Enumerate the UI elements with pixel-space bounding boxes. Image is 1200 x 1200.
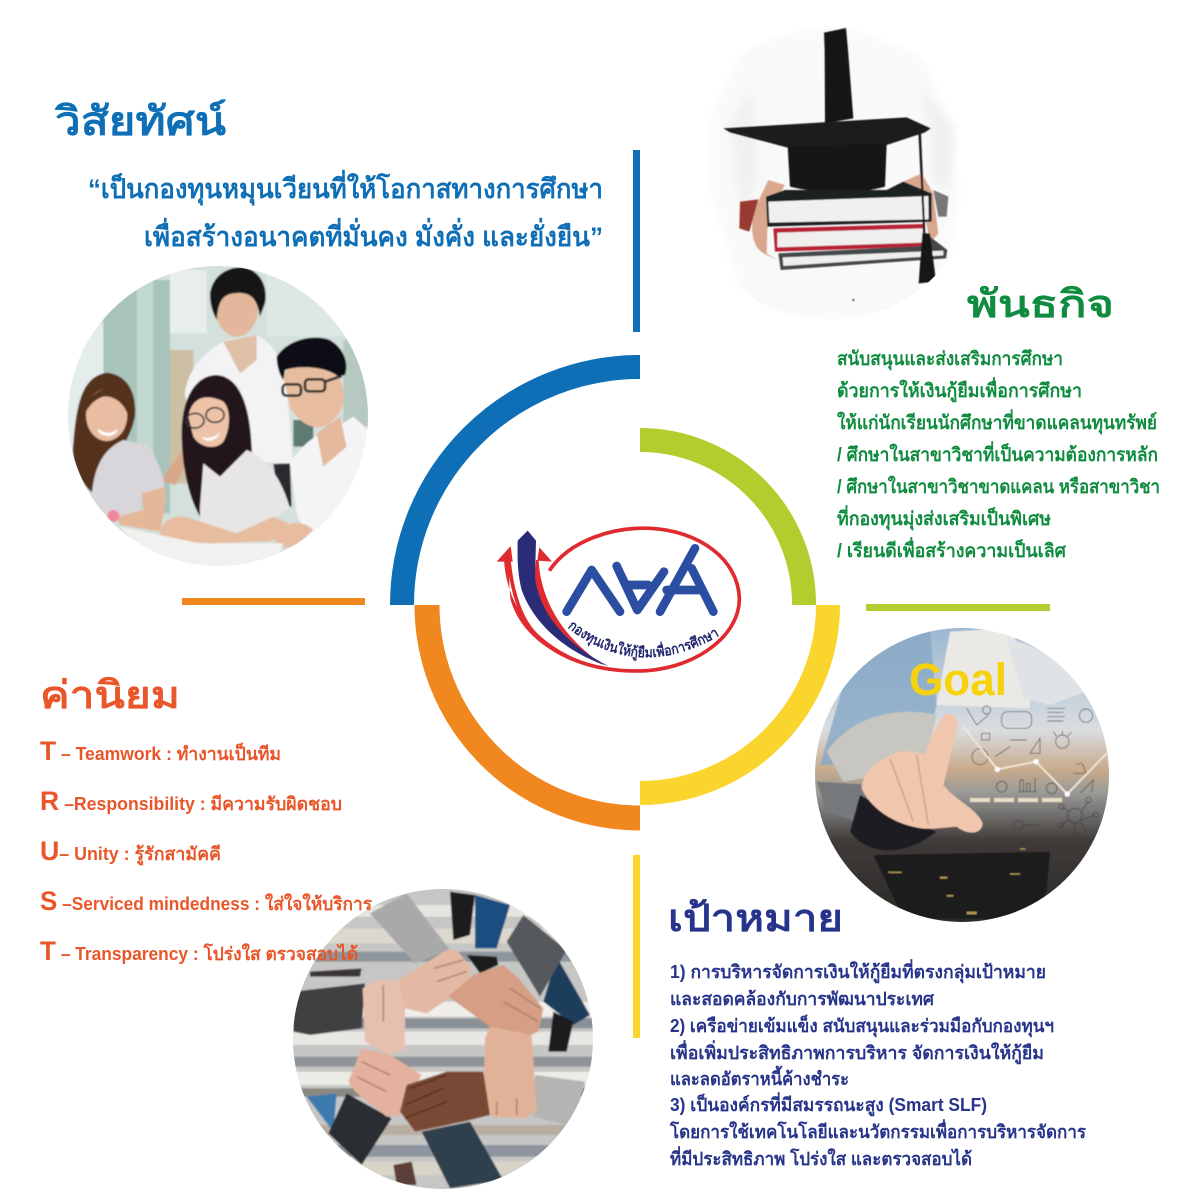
- middle girl: [182, 375, 252, 517]
- sleeves: [370, 893, 450, 963]
- values list: TRUST: S –Serviced mindedness : ใส่ใจให้บริการ: [40, 886, 372, 916]
- values list: TRUST: T – Transparency : โปร่งใส ตรวจสอบได้: [40, 936, 358, 966]
- heading: mission: พันธกิจ: [967, 284, 1114, 326]
- mission text: / ศึกษาในสาขาวิชาขาดแคลน หรือสาขาวิชา: [837, 475, 1160, 498]
- books: [766, 182, 932, 227]
- ring chart: four coloured arcs: [402, 367, 828, 818]
- goals text: 1) การบริหารจัดการเงินให้กู้ยืมที่ตรงกลุ่มเป้าหมาย: [670, 959, 1046, 984]
- heading: goals: เป้าหมาย: [668, 898, 843, 940]
- heading: values: ค่านิยม: [40, 675, 180, 717]
- label: Goal: Goal: [909, 654, 1007, 705]
- hands: [398, 950, 472, 1013]
- divider: green horizontal: [866, 604, 1050, 611]
- mission text: ให้แก่นักเรียนนักศึกษาที่ขาดแคลนทุนทรัพย์: [837, 409, 1157, 435]
- logo: [496, 526, 742, 673]
- left girl: [73, 373, 135, 493]
- goals text: ที่มีประสิทธิภาพ โปร่งใส และตรวจสอบได้: [670, 1146, 972, 1169]
- feet in background: [450, 892, 475, 940]
- mission text: [837, 348, 1160, 562]
- goals text: [669, 959, 1086, 1169]
- heading: vision: วิสัยทัศน์: [54, 99, 227, 144]
- values list: TRUST: R –Responsibility : มีความรับผิดชอบ: [40, 786, 342, 816]
- values list: TRUST: [40, 736, 372, 966]
- sleeve: [850, 795, 937, 850]
- vision statement: เพื่อสร้างอนาคตที่มั่นคง มั่งคั่ง และยั่งยืน”: [144, 217, 603, 252]
- right boy: [289, 416, 368, 537]
- hand: [862, 714, 983, 833]
- floor stripes: [290, 905, 600, 1175]
- divider: yellow vertical: [633, 855, 640, 1038]
- photo: goal: [810, 625, 1110, 925]
- goals text: 3) เป็นองค์กรที่มีสมรรถนะสูง (Smart SLF): [670, 1092, 987, 1117]
- photo: joined hands: [290, 885, 600, 1195]
- tie: [824, 28, 853, 123]
- table: [120, 527, 283, 570]
- mission text: / ศึกษาในสาขาวิชาที่เป็นความต้องการหลัก: [837, 441, 1158, 466]
- divider: orange horizontal: [182, 598, 365, 605]
- goals text: และลดอัตราหนี้ค้างชำระ: [670, 1065, 849, 1089]
- logo letters: [567, 548, 713, 612]
- divider: blue vertical: [633, 150, 640, 332]
- values list: TRUST: T – Teamwork : ทำงานเป็นทีม: [40, 736, 281, 766]
- doodles: [967, 706, 1098, 838]
- mission text: ที่กองทุนมุ่งส่งเสริมเป็นพิเศษ: [837, 505, 1051, 531]
- logo navy arrow: [518, 531, 608, 666]
- shirt: [710, 28, 957, 320]
- back boy body: [185, 335, 293, 463]
- vision statement: [88, 169, 603, 252]
- goals text: เพื่อเพิ่มประสิทธิภาพการบริหาร จัดการเงินให้กู้ยืม: [670, 1040, 1044, 1065]
- goals text: 2) เครือข่ายเข้มแข็ง สนับสนุนและร่วมมือกับกองทุนฯ: [670, 1014, 1054, 1038]
- goals text: และสอดคล้องกับการพัฒนาประเทศ: [670, 989, 935, 1009]
- photo: graduate cap and books: [722, 27, 954, 302]
- mission text: / เรียนดีเพื่อสร้างความเป็นเลิศ: [837, 537, 1067, 562]
- tassel: [918, 125, 925, 233]
- goals text: โดยการใช้เทคโนโลยีและนวัตกรรมเพื่อการบริหารจัดการ: [669, 1119, 1086, 1142]
- mission text: สนับสนุนและส่งเสริมการศึกษา: [837, 348, 1063, 371]
- city lights: [969, 797, 1063, 803]
- logo curved text: กองทุนเงินให้กู้ยืมเพื่อการศึกษา: [568, 622, 719, 661]
- mission text: ด้วยการให้เงินกู้ยืมเพื่อการศึกษา: [837, 377, 1082, 403]
- cap: [723, 117, 931, 147]
- photo: students: [60, 260, 380, 570]
- logo red ellipse and arrow: [508, 528, 739, 671]
- values list: TRUST: U– Unity : รู้รักสามัคคี: [40, 836, 221, 866]
- vision statement: “เป็นกองทุนหมุนเวียนที่ให้โอกาสทางการศึกษา: [88, 169, 603, 206]
- hands: [752, 180, 785, 260]
